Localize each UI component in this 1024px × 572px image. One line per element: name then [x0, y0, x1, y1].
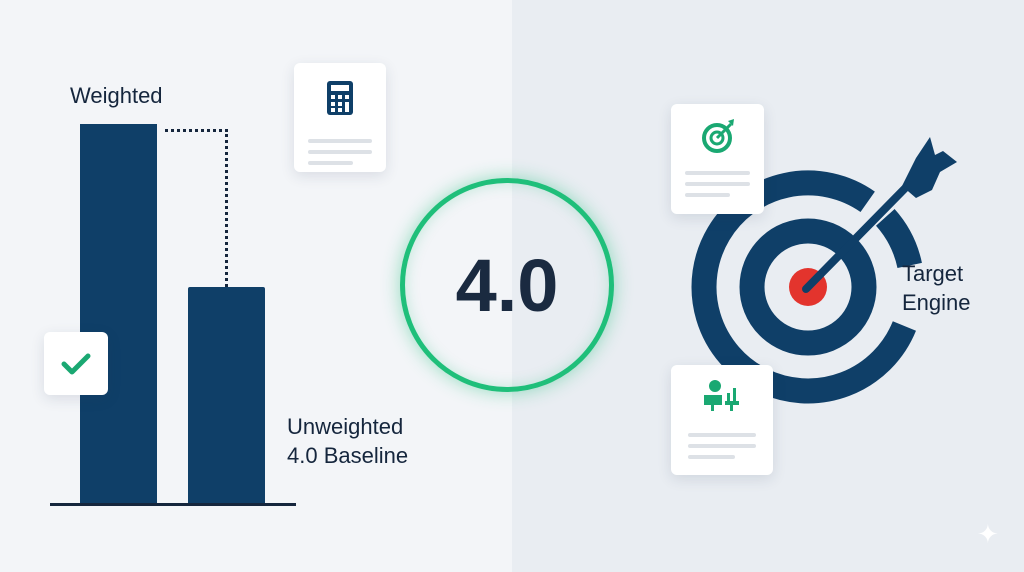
label: Unweighted 4.0 Baseline: [287, 414, 408, 468]
baseline axis: [50, 503, 296, 506]
label: Target Engine: Engine: [902, 290, 971, 315]
label: Target Engine: Target: [902, 261, 963, 286]
arrow: [806, 168, 925, 289]
card: calculator: [294, 63, 386, 172]
card: target icon: [671, 104, 764, 214]
label: Target Engine: [902, 261, 971, 315]
label: Unweighted 4.0 Baseline: Unweighted: [287, 414, 403, 439]
chart: bars: [50, 124, 296, 506]
badge: 4.0 circle: [400, 178, 614, 392]
card: checkmark: [44, 332, 108, 395]
bar: weighted: [80, 124, 157, 505]
label: Unweighted 4.0 Baseline: 4.0 Baseline: [287, 443, 408, 468]
card: people icon: [671, 365, 773, 475]
bar: unweighted: [188, 287, 265, 505]
icon: sparkle: ✦: [977, 519, 999, 549]
dotted connector: [165, 129, 228, 287]
icon: calculator: [327, 81, 353, 115]
label: Weighted: Weighted: [70, 83, 163, 108]
badge: 4.0 circle: 4.0: [456, 244, 558, 326]
